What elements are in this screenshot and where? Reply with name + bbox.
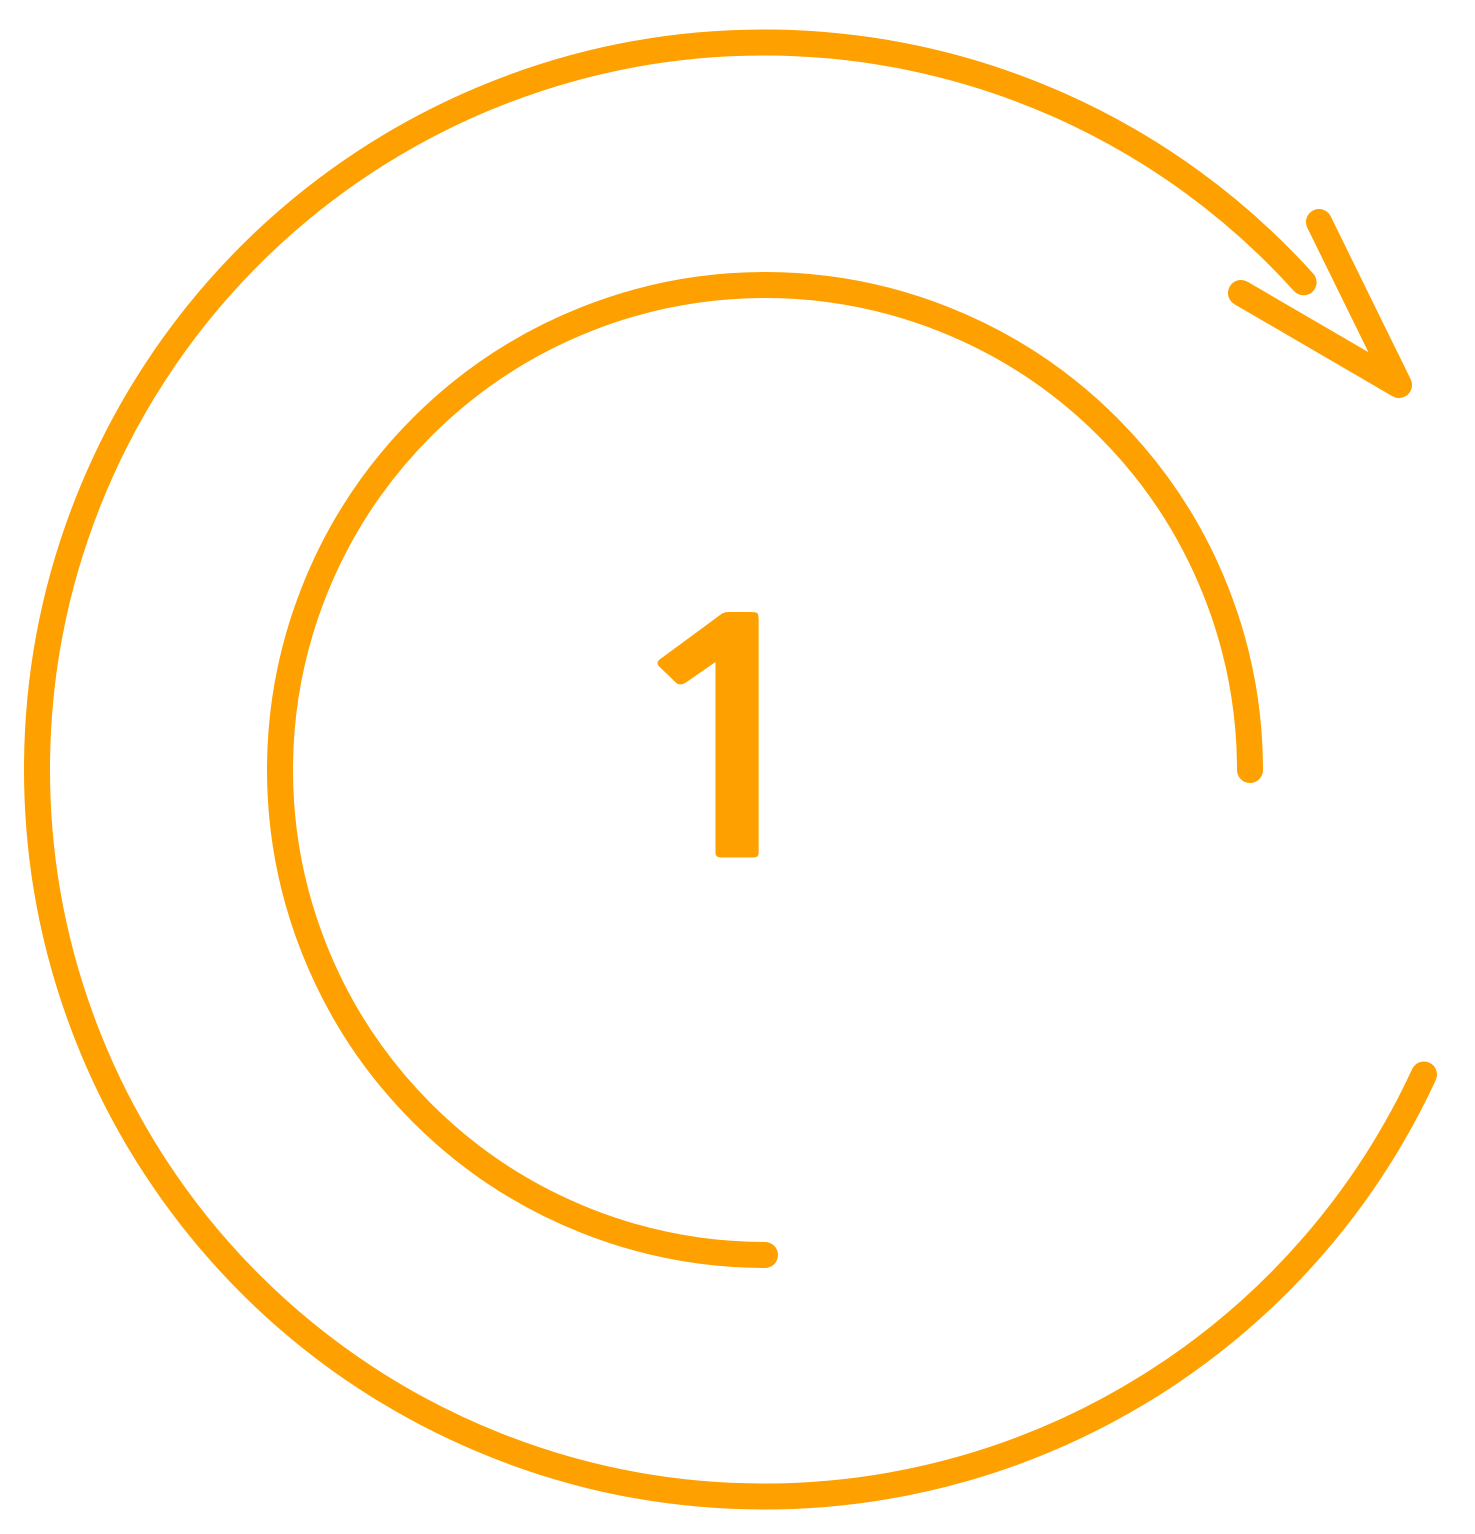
inner circular arc [280,285,1250,1255]
arrowhead [1241,222,1399,385]
number 1: 1 [606,586,850,905]
